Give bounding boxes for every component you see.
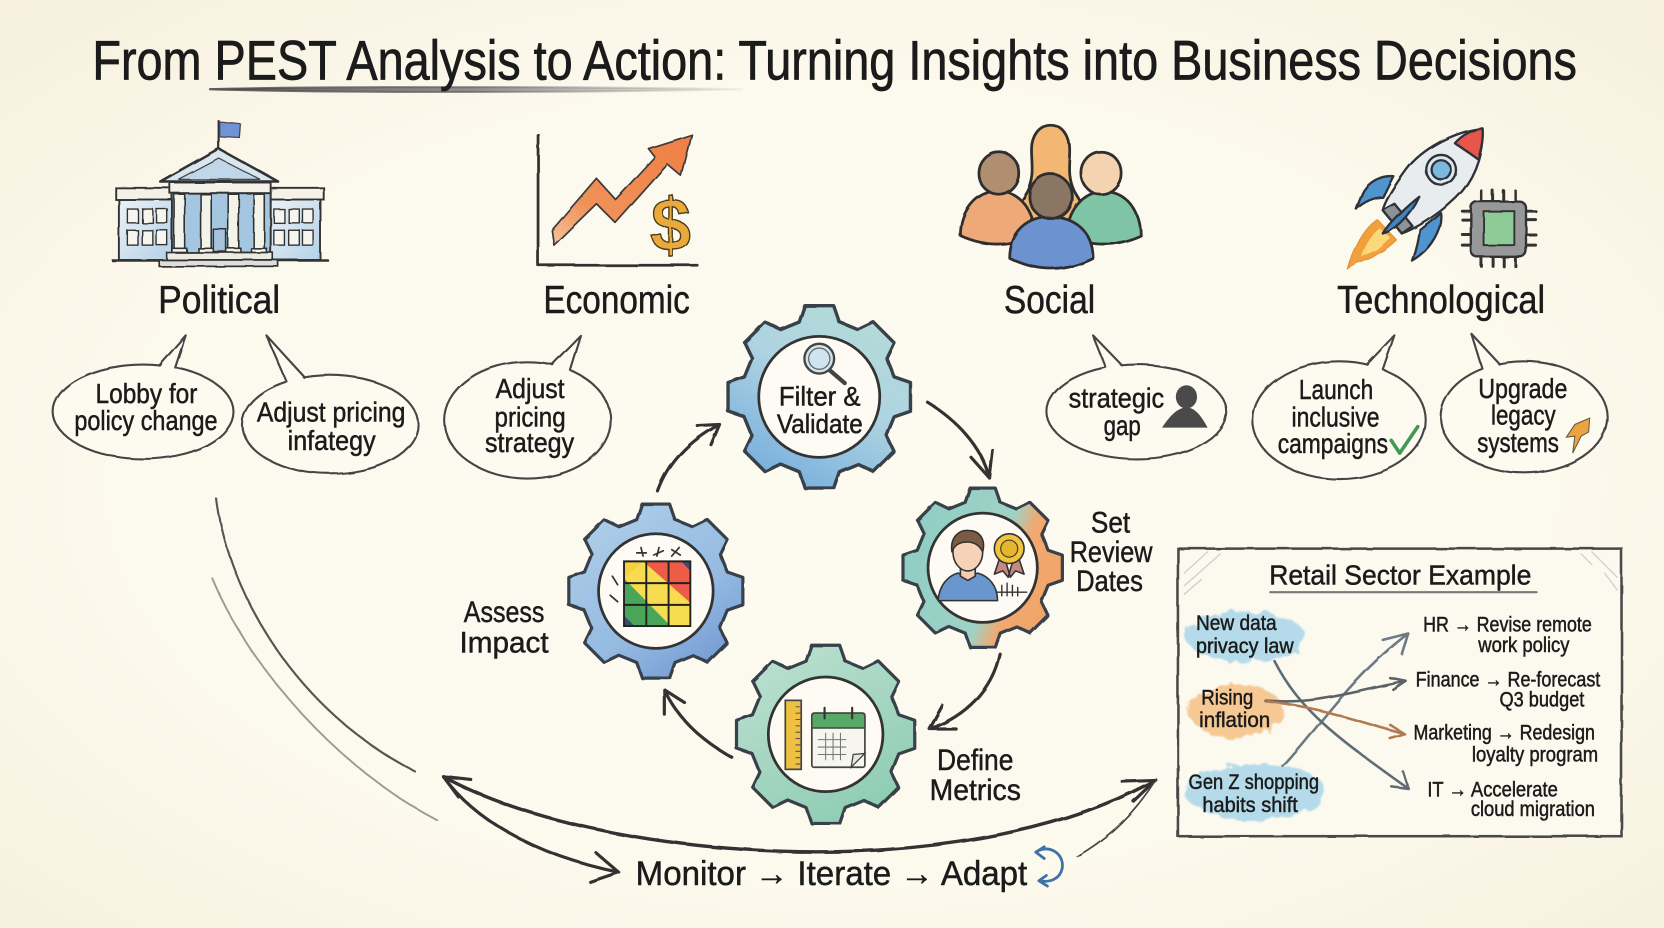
arrows: process cycle	[658, 402, 1000, 758]
gear: filter and validate	[728, 306, 910, 488]
heading: social: Social	[1004, 278, 1095, 322]
icon: green check	[1391, 427, 1418, 453]
speech bubble: strategic gap: gap	[1104, 410, 1141, 441]
label: set review dates: Set	[1091, 507, 1131, 540]
text: causes: privacy law	[1196, 635, 1294, 658]
arrows: cause to action	[1265, 634, 1408, 788]
text: causes: Gen Z shopping	[1189, 771, 1319, 794]
label: define metrics: Metrics	[930, 774, 1021, 807]
panel: social	[960, 125, 1226, 459]
speech bubble: upgrade legacy	[1441, 334, 1607, 473]
icon: government building	[113, 121, 328, 266]
label: assess impact: Impact	[460, 627, 549, 660]
icon: cycle arrow	[1036, 847, 1062, 886]
gear: filter and validate: Validate	[777, 409, 863, 439]
label: define metrics: Define	[937, 744, 1013, 777]
speech bubble: launch campaigns	[1253, 335, 1426, 479]
gear: set review dates	[903, 488, 1153, 647]
speech bubble: launch campaigns: inclusive	[1291, 402, 1380, 433]
speech bubble: lobby: Lobby for	[96, 378, 197, 409]
text: causes	[1189, 612, 1319, 817]
gear: filter and validate: Filter &	[779, 381, 861, 411]
icon: ruler	[785, 700, 801, 769]
text: causes: habits shift	[1202, 794, 1298, 817]
label: monitor iterate adapt: Monitor → Iterate → Adapt	[636, 855, 1028, 893]
icon: small orange rocket	[1566, 418, 1590, 453]
speech bubble: adjust pricing strategy: pricing	[495, 402, 566, 433]
watercolor tags: causes	[1184, 611, 1327, 819]
heading: political: Political	[158, 278, 280, 322]
speech bubble: upgrade legacy: legacy	[1491, 399, 1556, 430]
text: actions	[1414, 613, 1600, 821]
icon: person silhouette	[1162, 385, 1208, 428]
speech bubble: lobby: policy change	[74, 405, 218, 436]
label: set review dates: Dates	[1076, 565, 1143, 598]
speech bubble: adjust pricing: Adjust pricing	[257, 396, 405, 427]
speech bubble: adjust pricing strategy: Adjust	[496, 373, 565, 404]
text: actions: Finance → Re-forecast	[1416, 669, 1600, 692]
panel: economic	[444, 135, 697, 479]
speech bubble: adjust pricing	[242, 335, 418, 474]
label: assess impact: Assess	[464, 596, 544, 629]
text: actions: IT → Accelerate	[1427, 778, 1558, 801]
gear: define metrics	[737, 645, 1021, 823]
icon: rising chart with dollar: $	[651, 183, 691, 266]
speech bubble: launch campaigns: Launch	[1299, 374, 1373, 405]
decorative sweep curves: long feedback arcs	[212, 499, 437, 820]
speech bubble: launch campaigns: campaigns	[1278, 428, 1388, 459]
text: actions: work policy	[1477, 634, 1570, 657]
speech bubble: upgrade legacy: systems	[1477, 427, 1559, 458]
label: set review dates: Review	[1070, 536, 1153, 569]
speech bubble: lobby	[53, 335, 233, 459]
text: actions: cloud migration	[1471, 798, 1595, 821]
icon: calendar	[812, 708, 865, 767]
gear: assess impact	[460, 504, 743, 678]
panel: technological	[1253, 128, 1607, 479]
icon: person with award	[938, 530, 1027, 601]
text: actions: loyalty program	[1472, 743, 1598, 766]
speech bubble: adjust pricing: infategy	[288, 425, 376, 456]
heading: technological: Technological	[1337, 278, 1545, 322]
icon: rocket	[1348, 128, 1483, 270]
text: actions: Q3 budget	[1499, 689, 1584, 712]
label: set review dates	[1070, 507, 1153, 598]
heading: retail sector example: Retail Sector Example	[1269, 560, 1531, 591]
icon: group of people	[960, 125, 1141, 268]
icon: magnifier	[804, 344, 845, 383]
speech bubble: adjust pricing strategy	[444, 335, 611, 479]
text: causes: inflation	[1199, 709, 1270, 732]
heading: economic: Economic	[543, 278, 690, 322]
panel: retail sector example	[1178, 549, 1622, 836]
icon: rising chart with dollar	[538, 135, 697, 266]
speech bubble: strategic gap: strategic	[1069, 382, 1164, 413]
speech bubble: upgrade legacy: Upgrade	[1478, 373, 1567, 404]
panel: political	[53, 121, 418, 474]
text: causes: Rising	[1201, 687, 1253, 710]
text: causes: New data	[1196, 612, 1277, 635]
text: actions: Marketing → Redesign	[1414, 722, 1595, 745]
label: define metrics	[930, 744, 1021, 807]
text: actions: HR → Revise remote	[1423, 613, 1592, 636]
label: assess impact	[460, 596, 549, 660]
icon: microchip	[1462, 191, 1536, 266]
icon: risk matrix	[610, 548, 690, 626]
speech bubble: adjust pricing strategy: strategy	[485, 427, 574, 458]
speech bubble: strategic gap	[1047, 335, 1226, 459]
arrow: monitor feedback loop	[444, 777, 1156, 882]
